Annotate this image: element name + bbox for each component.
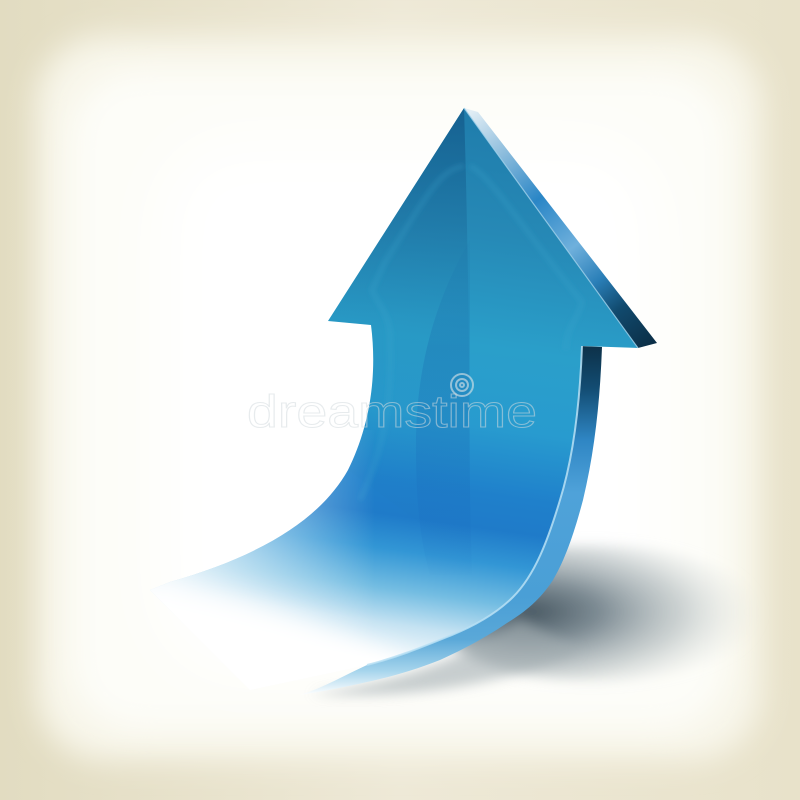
watermark	[247, 374, 537, 437]
inner bevel outline	[410, 165, 462, 222]
arrow front face	[150, 108, 638, 666]
watermark text: dreamstime	[247, 386, 537, 437]
central curved band	[416, 292, 470, 456]
left half shade	[344, 108, 468, 296]
highlight edge	[367, 346, 582, 665]
watermark logo spiral	[451, 374, 473, 396]
arrow shaft side face	[300, 346, 602, 695]
arrow	[150, 108, 657, 692]
left horizontal fade	[150, 430, 366, 619]
shadow under arrow	[310, 545, 760, 695]
lower-left white fade	[161, 587, 378, 652]
arrow head side face	[464, 108, 657, 348]
